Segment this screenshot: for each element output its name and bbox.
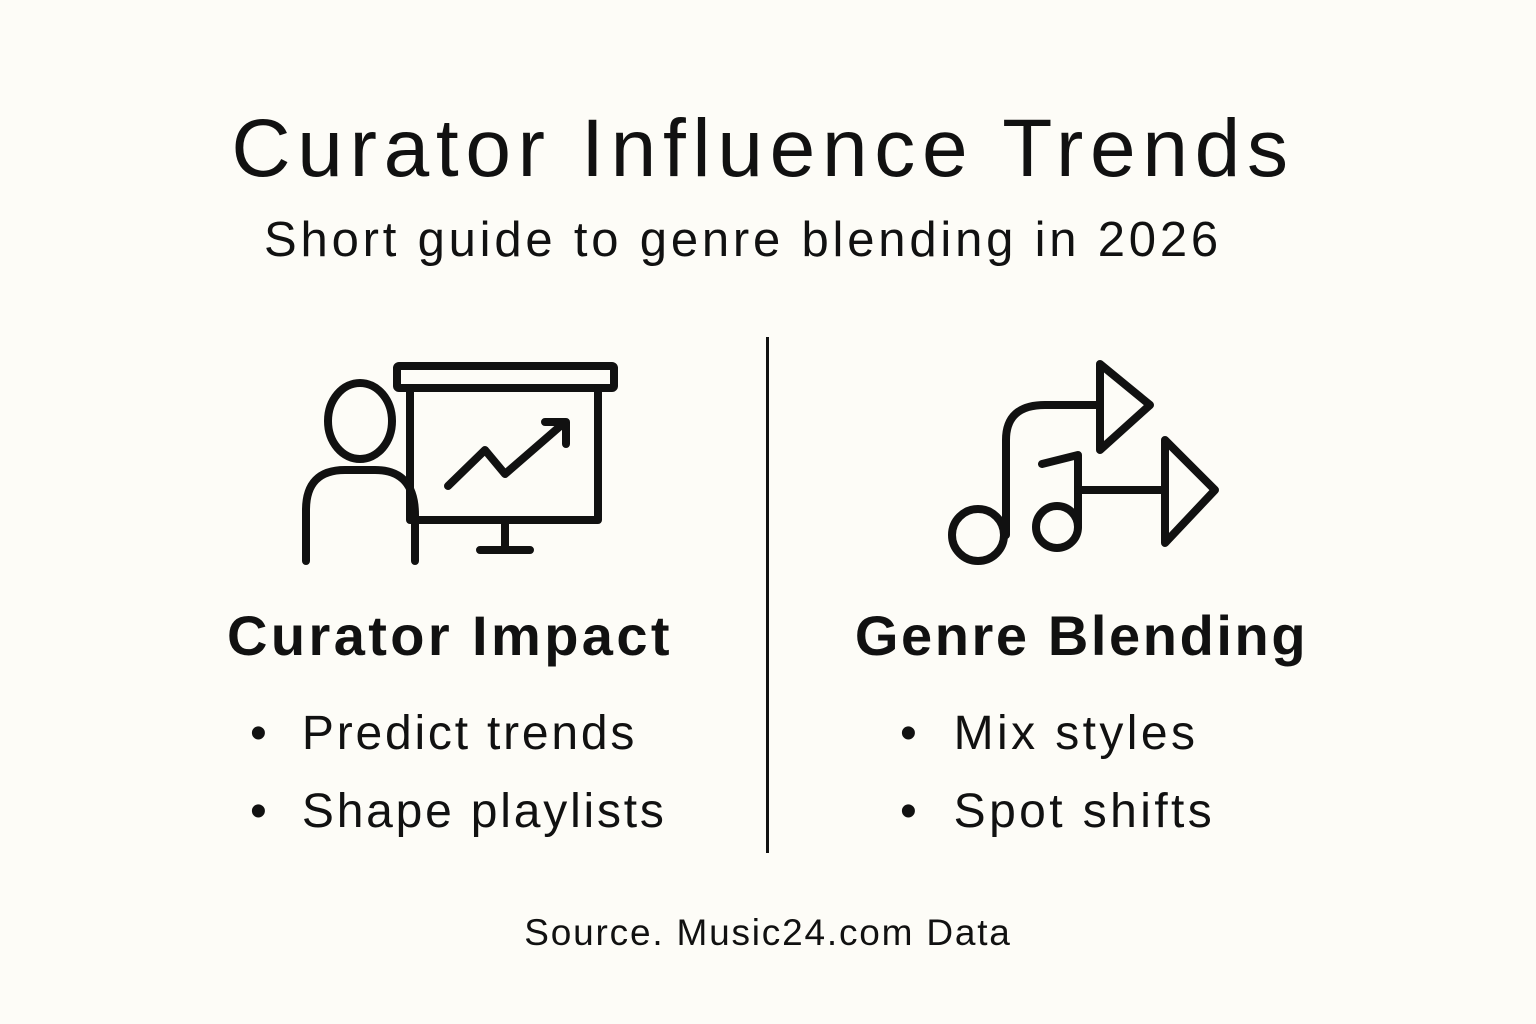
source note: Source. Music24.com Data: [524, 912, 1012, 953]
title: Curator Influence Trends: [231, 103, 1295, 194]
bullet list: • Shape playlists: [250, 785, 667, 838]
icon: music notes with arrows: [948, 360, 1219, 565]
panel: genre blending: [855, 360, 1308, 838]
bullet list: • Predict trends: [250, 707, 637, 760]
panel: curator impact: [227, 362, 673, 838]
divider: [766, 337, 769, 853]
bullet list: [250, 707, 667, 838]
subtitle: Short guide to genre blending in 2026: [264, 213, 1222, 267]
bullet list: • Mix styles: [900, 707, 1198, 760]
bullet list: • Spot shifts: [900, 785, 1215, 838]
icon: presenter with chart: [302, 362, 618, 565]
bullet list: [900, 707, 1215, 838]
heading: Genre Blending: [855, 604, 1308, 667]
heading: Curator Impact: [227, 604, 673, 667]
